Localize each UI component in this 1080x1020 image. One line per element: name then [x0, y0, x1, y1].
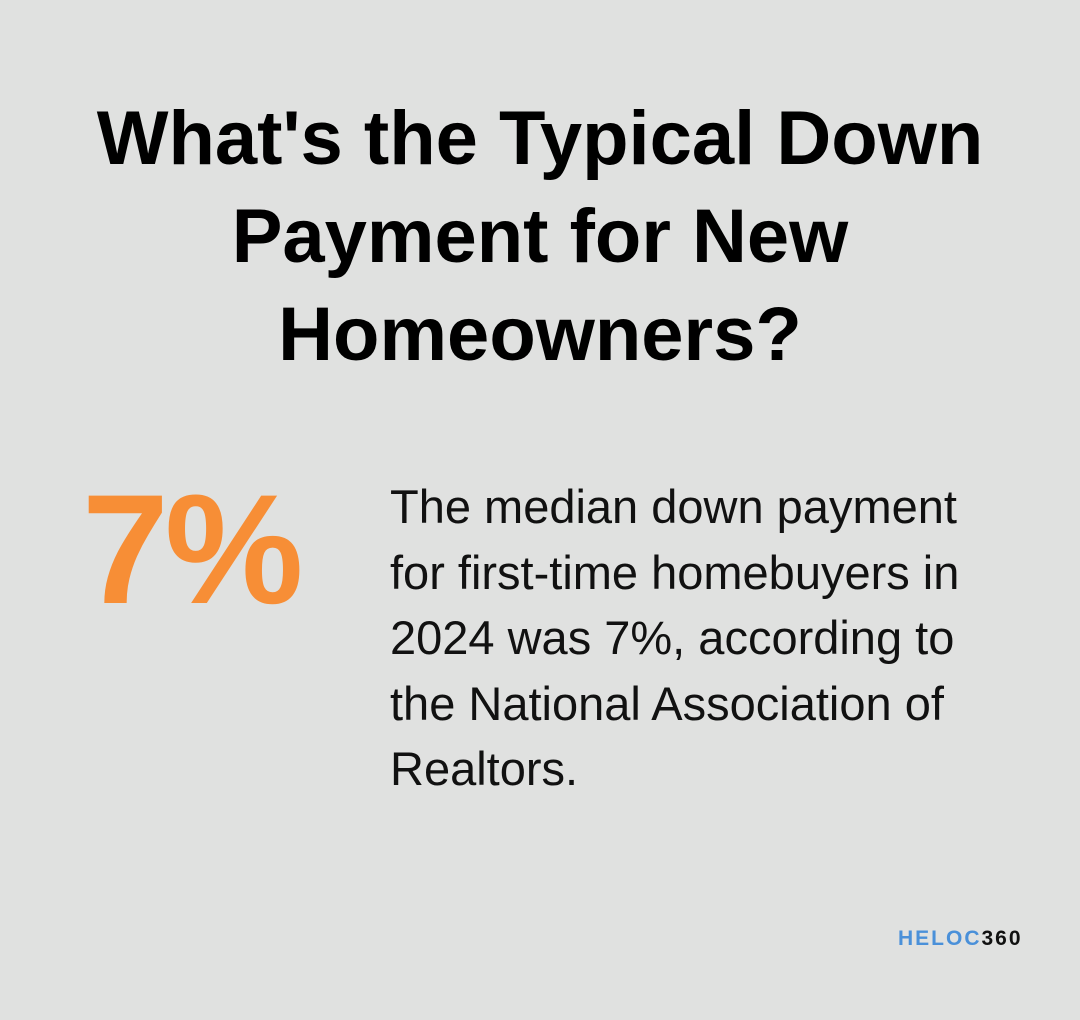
- description text: [390, 480, 959, 795]
- title: Payment for New: [232, 194, 848, 279]
- title: Homeowners?: [278, 292, 802, 377]
- title: What's the Typical Down: [97, 96, 983, 181]
- description text: The median down payment: [390, 480, 957, 533]
- description text: the National Association of: [390, 676, 944, 730]
- logo: HELOC360: HELOC360: [898, 927, 1023, 950]
- description text: 2024 was 7%, according to: [390, 611, 954, 664]
- description text: for first-time homebuyers in: [390, 546, 959, 598]
- title: [96, 96, 983, 377]
- description text: Realtors.: [390, 742, 578, 795]
- big stat: 7%: 7%: [82, 463, 299, 637]
